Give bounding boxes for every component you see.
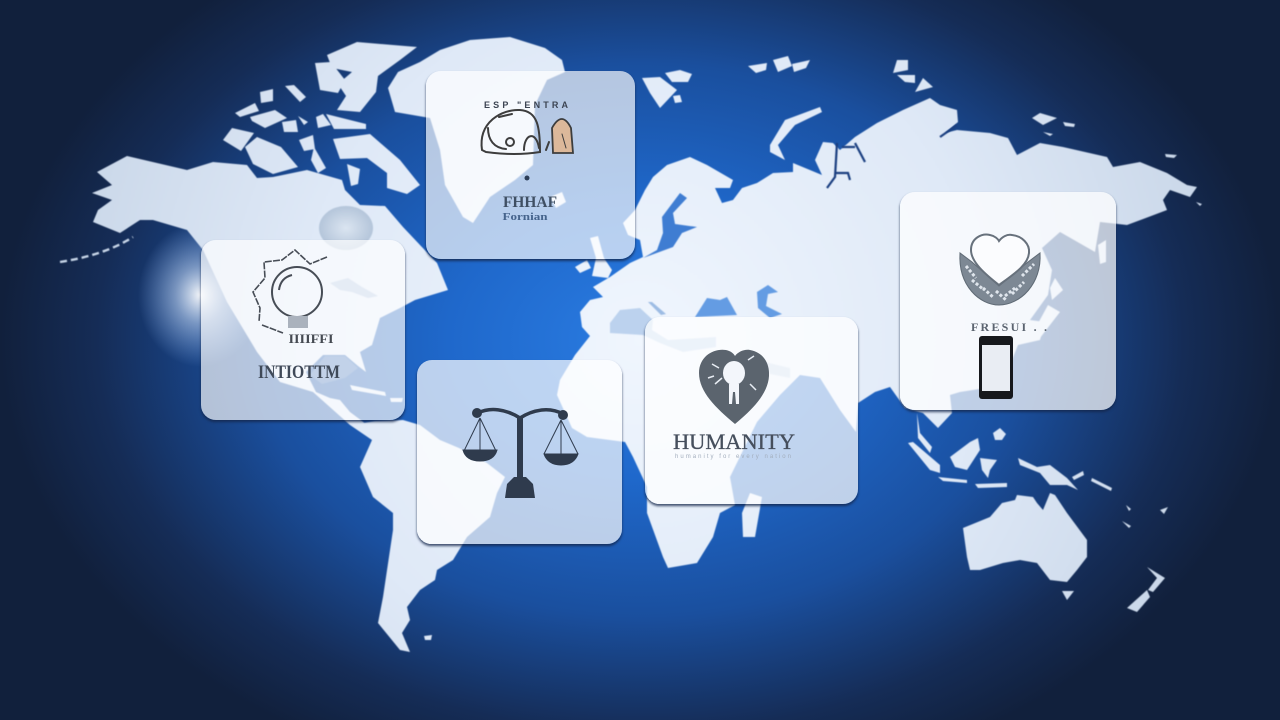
Persian Gulf — [765, 362, 790, 378]
card subheading: Fornian — [502, 211, 548, 223]
New Siberian and Wrangel islands — [1032, 113, 1202, 206]
Black Sea — [695, 297, 737, 317]
Caribbean and Newfoundland islands — [350, 272, 440, 402]
panel: humanity card — [645, 317, 858, 504]
Iceland — [550, 192, 566, 208]
Falkland Islands — [424, 635, 432, 640]
Gulf of Mexico tint — [310, 356, 358, 384]
Japan and Sakhalin — [1030, 240, 1106, 338]
card heading: FHHAF — [503, 194, 557, 211]
Siberian rivers and gulfs — [827, 125, 957, 188]
Tasmania — [1062, 591, 1074, 600]
icon label dots: ESP "ENTRA — [484, 100, 568, 110]
Australia — [963, 493, 1087, 582]
North America — [92, 156, 448, 425]
card heading: INTIOTTM — [258, 362, 340, 383]
world map — [60, 37, 1202, 652]
icon caption: FRESUI . . — [971, 320, 1047, 334]
icon: building dome with door — [482, 110, 573, 154]
Adriatic Sea — [648, 302, 666, 315]
Mediterranean Sea — [610, 308, 716, 352]
South America — [350, 420, 505, 652]
British Isles — [575, 236, 612, 278]
Canadian Arctic islands — [223, 42, 420, 194]
Madagascar — [742, 493, 762, 537]
panel: top card — [426, 71, 635, 259]
panel: right card — [900, 192, 1116, 410]
icon: heart held in hands — [960, 235, 1040, 305]
Severnaya Zemlya — [893, 60, 933, 92]
card heading: HUMANITY — [673, 429, 795, 454]
panel: bottom justice card — [417, 360, 622, 544]
dot — [524, 176, 530, 180]
Caspian Sea — [757, 285, 782, 318]
Svalbard — [642, 70, 692, 108]
Baltic Sea — [643, 193, 697, 258]
Indonesia and Malay islands — [908, 413, 1168, 528]
icon caption: IIIIFFI — [288, 331, 334, 346]
light glow, left — [138, 223, 262, 367]
Hudson Bay haze — [319, 206, 373, 250]
icon: heart with bulb — [699, 350, 769, 424]
water: inland seas — [310, 125, 957, 384]
Greenland — [388, 37, 565, 223]
icon: mobile phone — [979, 336, 1013, 399]
Aleutian chain — [60, 237, 133, 262]
card subtext: humanity for every nation — [675, 454, 791, 460]
panel: left card — [201, 240, 405, 420]
icon: light bulb with gear — [253, 250, 327, 333]
Novaya Zemlya — [770, 107, 822, 160]
New Zealand — [1127, 567, 1165, 612]
Franz Josef Land — [748, 56, 810, 73]
Great Lakes — [330, 278, 378, 298]
Afro-Eurasia — [557, 98, 1197, 568]
icon: balance scale — [463, 408, 578, 498]
